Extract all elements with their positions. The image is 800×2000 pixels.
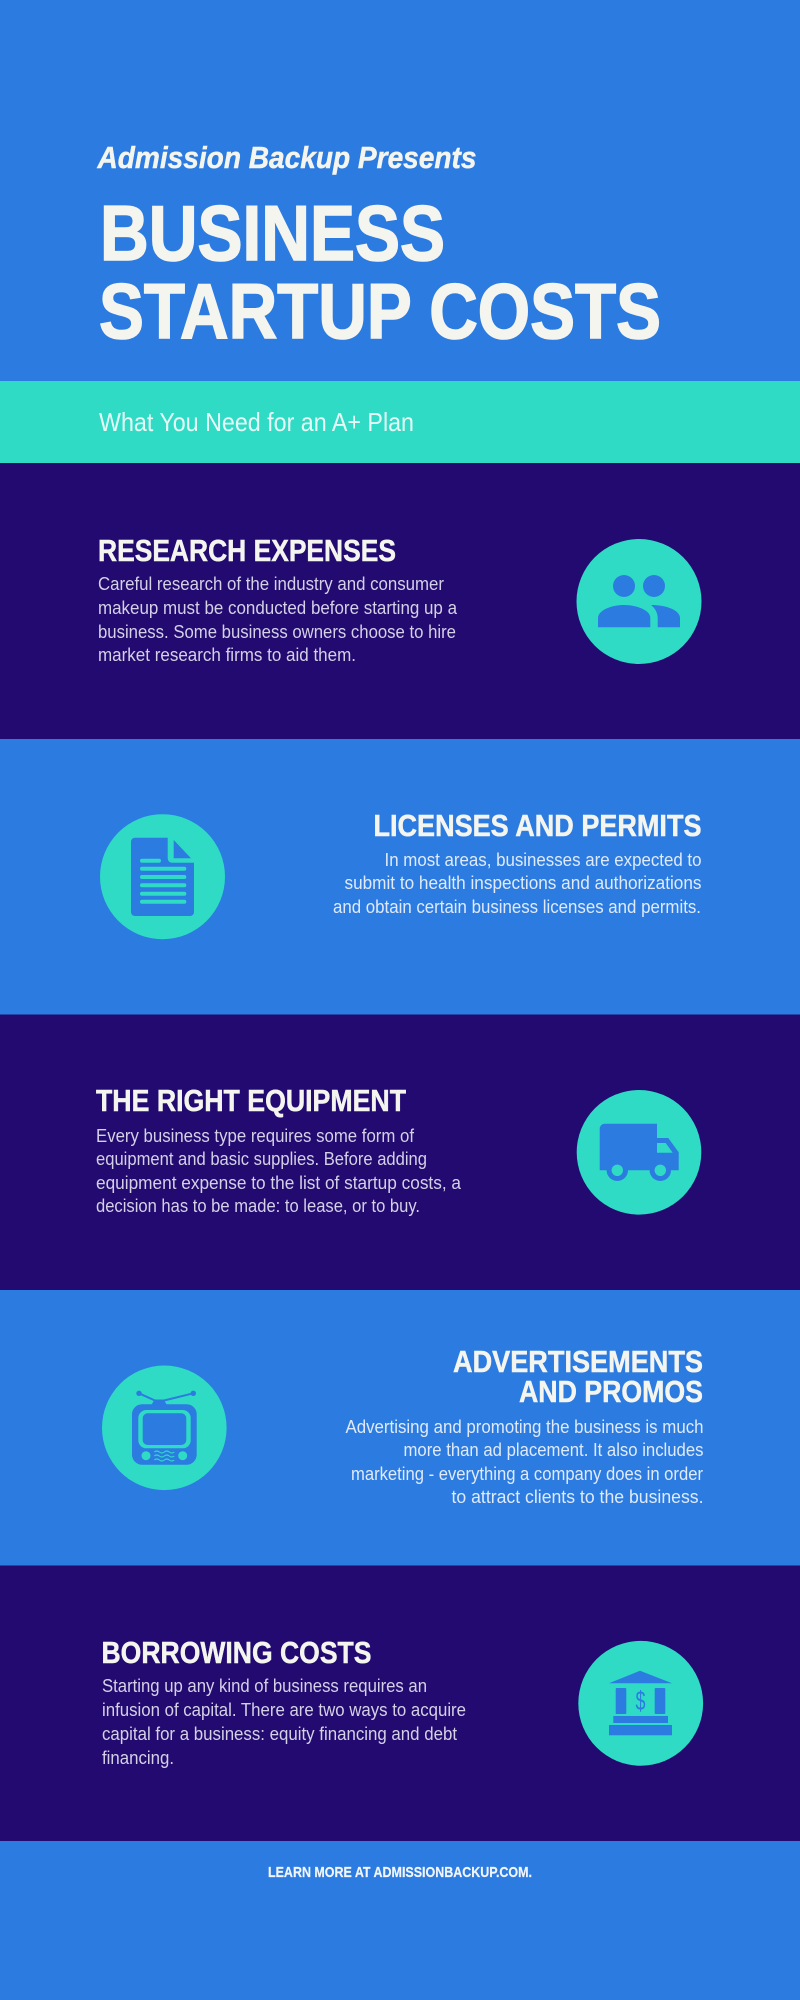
text: advertisements and promos: more than ad placement. It also includes — [404, 1440, 704, 1460]
text: research expenses: Careful research of the industry and consumer — [98, 574, 444, 594]
main title: STARTUP COSTS — [99, 267, 661, 355]
heading: advertisements and promos: ADVERTISEMENTS — [453, 1344, 703, 1379]
text: research expenses — [98, 574, 458, 665]
heading: borrowing costs: BORROWING COSTS — [102, 1635, 372, 1670]
heading: licenses and permits: LICENSES AND PERMITS — [374, 808, 702, 843]
panel: advertisements and promos — [102, 1344, 704, 1507]
text: the right equipment: Every business type requires some form of — [96, 1126, 415, 1146]
text: research expenses: market research firms to aid them. — [98, 645, 356, 665]
icon: bank — [578, 1641, 703, 1766]
text: licenses and permits: submit to health inspections and authorizations — [344, 873, 702, 893]
text: research expenses: makeup must be conducted before starting up a — [98, 598, 458, 618]
header panel — [97, 140, 661, 355]
text: advertisements and promos: marketing - everything a company does in order — [351, 1464, 703, 1484]
main title: BUSINESS — [100, 189, 445, 277]
icon: people — [576, 539, 702, 664]
heading: research expenses: RESEARCH EXPENSES — [98, 533, 396, 568]
icon: bank: $ — [636, 1686, 646, 1716]
text: the right equipment: equipment expense to the list of startup costs, a — [96, 1173, 462, 1193]
icon: truck — [577, 1090, 701, 1215]
footer call to action: LEARN MORE AT ADMISSIONBACKUP.COM. — [268, 1864, 532, 1881]
icon: television — [102, 1366, 227, 1490]
subtitle band — [0, 381, 800, 463]
presenter line: Admission Backup Presents — [97, 140, 476, 175]
text: borrowing costs: Starting up any kind of business requires an — [102, 1676, 427, 1696]
text: borrowing costs — [102, 1676, 466, 1768]
text: borrowing costs: capital for a business: equity financing and debt — [102, 1724, 457, 1744]
panel: the right equipment — [0, 1014, 800, 1290]
panel: research expenses — [0, 463, 800, 739]
text: the right equipment — [96, 1126, 462, 1216]
text: advertisements and promos: to attract clients to the business. — [452, 1487, 704, 1507]
panel: borrowing costs — [0, 1566, 800, 1841]
text: research expenses: business. Some business owners choose to hire — [98, 622, 456, 642]
main title — [99, 189, 661, 355]
text: advertisements and promos — [346, 1417, 704, 1507]
heading: advertisements and promos: AND PROMOS — [519, 1374, 703, 1409]
text: advertisements and promos: Advertising and promoting the business is much — [346, 1417, 704, 1437]
text: licenses and permits — [333, 850, 702, 917]
text: the right equipment: equipment and basic supplies. Before adding — [96, 1149, 427, 1169]
text: licenses and permits: and obtain certain business licenses and permits. — [333, 897, 701, 917]
panel: licenses and permits — [100, 808, 702, 939]
subtitle band: What You Need for an A+ Plan — [99, 407, 414, 437]
text: licenses and permits: In most areas, businesses are expected to — [384, 850, 702, 870]
text: borrowing costs: financing. — [102, 1748, 174, 1768]
heading: advertisements and promos — [453, 1344, 703, 1409]
text: borrowing costs: infusion of capital. There are two ways to acquire — [102, 1700, 466, 1720]
text: the right equipment: decision has to be made: to lease, or to buy. — [96, 1196, 420, 1216]
icon: document — [100, 814, 225, 939]
heading: the right equipment: THE RIGHT EQUIPMENT — [96, 1083, 406, 1118]
